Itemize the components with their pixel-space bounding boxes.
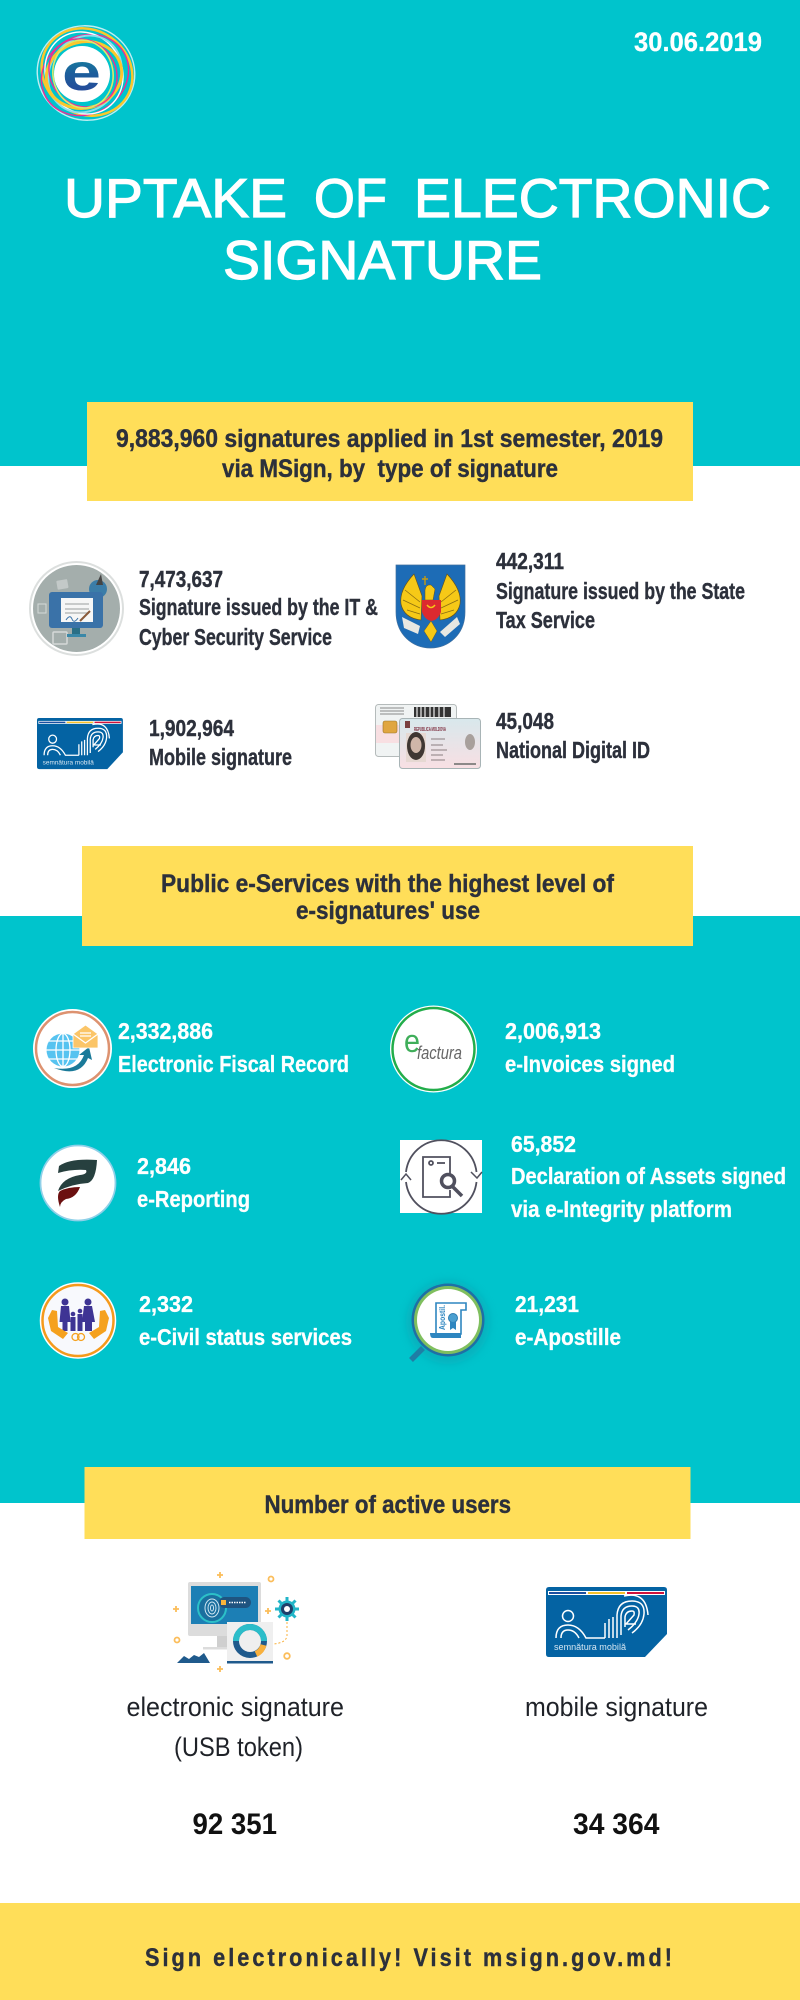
icon: e-invoices (e-factura): factura: [417, 1043, 462, 1063]
panel: total signatures heading: 9,883,960 signatures applied in 1st semester, 2019: [116, 425, 663, 453]
date: 30.06.2019: [634, 27, 762, 57]
stat: state tax service: Tax Service: [496, 607, 595, 633]
stat: electronic fiscal record: [118, 1018, 349, 1077]
stat: IT and cyber security service: [139, 566, 378, 650]
label: electronic signature: [126, 1692, 344, 1762]
label: mobile signature: mobile signature: [525, 1692, 708, 1722]
icon: national ID cards: REPUBLICA MOLDOVA: [414, 727, 446, 733]
stat: e-invoices: e-Invoices signed: [505, 1051, 675, 1077]
panel: footer call to action: [0, 1903, 800, 2000]
stat: e-reporting: e-Reporting: [137, 1186, 250, 1212]
stat: mobile signature: [149, 715, 292, 770]
stat: e-civil status: e-Civil status services: [139, 1324, 352, 1350]
stat: e-apostille: 21,231: [515, 1291, 579, 1317]
icon: USB token computer: [173, 1572, 299, 1672]
stat: e-apostille: e-Apostille: [515, 1324, 621, 1350]
icon: electronic fiscal record: [34, 1010, 111, 1087]
icon: mobile signature SIM card: [37, 718, 123, 769]
stat: declaration of assets: 65,852: [511, 1131, 576, 1157]
stat: electronic fiscal record: Electronic Fiscal Record: [118, 1051, 349, 1077]
panel: total signatures heading: [87, 402, 693, 501]
icon: mobile signature SIM: semnătura mobilă: [554, 1642, 626, 1652]
stat: declaration of assets: via e-Integrity platform: [511, 1196, 732, 1222]
panel: e-services band: [0, 916, 800, 1503]
icon: state tax service coat of arms: [396, 565, 465, 648]
label: electronic signature: (USB token): [174, 1732, 303, 1762]
stat: IT and cyber security service: 7,473,637: [139, 566, 223, 592]
panel: header band: [0, 0, 800, 466]
panel: footer call to action: Sign electronically! Visit msign.gov.md!: [145, 1944, 675, 1972]
icon: e-civil status: [40, 1283, 116, 1358]
icon: mobile signature SIM card: semnătura mobilă: [43, 760, 94, 767]
icon: e-governance logo: e: [62, 44, 101, 102]
stat: state tax service: [496, 548, 745, 633]
icon: e-reporting: [40, 1146, 116, 1220]
title: UPTAKE: [64, 167, 287, 229]
icon: e-apostille magnifier: Apostil.: [438, 1305, 447, 1330]
stat: mobile signature: 1,902,964: [149, 715, 234, 741]
stat: national digital ID: 45,048: [496, 708, 554, 734]
panel: total signatures heading: via MSign, by type of signature: [222, 455, 558, 483]
stat: e-invoices: 2,006,913: [505, 1018, 601, 1044]
icon: mobile signature SIM: [546, 1587, 667, 1657]
title: SIGNATURE: [223, 229, 542, 291]
stat: national digital ID: National Digital ID: [496, 737, 650, 763]
stat: state tax service: 442,311: [496, 548, 564, 574]
stat: e-civil status: [139, 1291, 352, 1350]
icon: national ID cards: [376, 704, 480, 768]
panel: public e-services heading: e-signatures' use: [296, 897, 480, 925]
label: electronic signature: electronic signature: [126, 1692, 344, 1722]
icon: declaration of assets: [400, 1140, 482, 1214]
number: mobile signature users: 34 364: [573, 1808, 660, 1841]
panel: public e-services heading: [82, 846, 693, 946]
stat: mobile signature: Mobile signature: [149, 744, 292, 770]
icon: e-invoices (e-factura): e: [404, 1023, 420, 1059]
panel: public e-services heading: Public e-Services with the highest level of: [161, 870, 615, 898]
stat: IT and cyber security service: Signature issued by the IT &: [139, 594, 378, 620]
title: [64, 167, 771, 291]
panel: active users heading: [84, 1467, 690, 1539]
stat: e-invoices: [505, 1018, 675, 1077]
stat: national digital ID: [496, 708, 650, 763]
icon: IT service monitor: [30, 562, 123, 655]
stat: e-civil status: 2,332: [139, 1291, 193, 1317]
icon: e-apostille magnifier: [406, 1280, 490, 1364]
title: ELECTRONIC: [414, 167, 771, 229]
stat: declaration of assets: [511, 1131, 786, 1222]
icon: e-invoices (e-factura): [390, 1006, 477, 1092]
title: OF: [314, 167, 387, 229]
stat: e-reporting: 2,846: [137, 1153, 191, 1179]
stat: IT and cyber security service: Cyber Security Service: [139, 624, 332, 650]
stat: e-reporting: [137, 1153, 250, 1212]
number: USB token users: 92 351: [192, 1808, 277, 1841]
panel: active users heading: Number of active users: [264, 1491, 511, 1519]
icon: e-governance logo: [24, 11, 150, 134]
stat: e-apostille: [515, 1291, 621, 1350]
stat: electronic fiscal record: 2,332,886: [118, 1018, 213, 1044]
